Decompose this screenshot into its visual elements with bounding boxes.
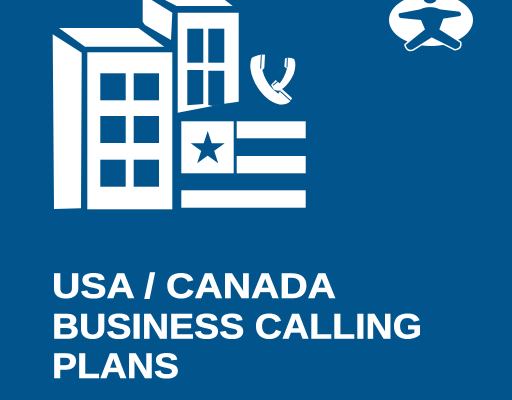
icon: flag: [181, 121, 306, 208]
icon: small building: [143, 0, 239, 113]
logo: figure in white oval: [389, 0, 473, 50]
title: USA / CANADA: [52, 266, 336, 306]
title: [52, 266, 422, 386]
title: BUSINESS CALLING: [52, 306, 422, 346]
icon: large building: [53, 28, 172, 209]
icon: telephone handset: [250, 55, 295, 105]
title: PLANS: [52, 346, 179, 386]
icon: star: [191, 131, 225, 163]
